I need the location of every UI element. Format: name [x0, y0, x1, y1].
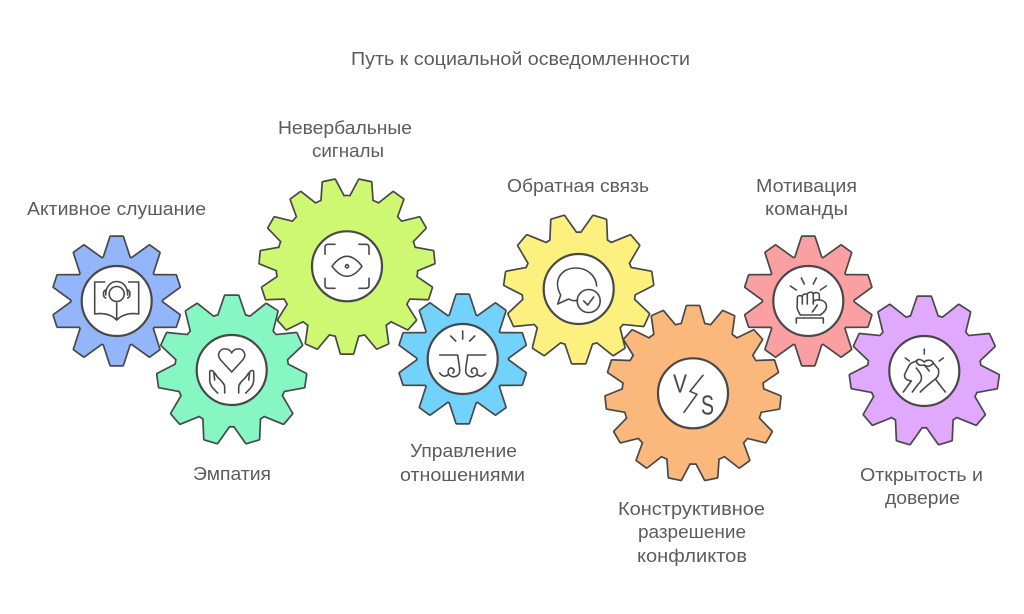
- label: team motivation: команды: [765, 199, 848, 219]
- label: relationship management: Управление: [410, 441, 517, 461]
- icon: versus mark: [673, 368, 714, 420]
- panel: blue gear, active listening: [52, 237, 182, 365]
- label: nonverbal signals: [278, 118, 412, 161]
- icon: raised fist: [790, 278, 826, 323]
- panel: green gear, empathy: [156, 296, 307, 445]
- panel: purple gear, openness and trust: [849, 297, 1000, 446]
- label: relationship management: [400, 441, 525, 485]
- label: relationship management: отношениями: [400, 465, 525, 485]
- label: conflict resolution: Конструктивное: [618, 499, 765, 519]
- label: feedback: Обратная связь: [507, 176, 649, 196]
- label: openness and trust: Открытость и: [860, 465, 983, 485]
- icon: chat bubble with check: [558, 268, 600, 312]
- panel: yellow gear, feedback: [503, 214, 654, 363]
- label: conflict resolution: разрешение: [638, 522, 746, 542]
- label: active listening: Активное слушание: [27, 199, 206, 219]
- label: openness and trust: доверие: [885, 488, 960, 508]
- label: empathy: Эмпатия: [193, 464, 271, 484]
- panel: lime gear, nonverbal signals: [259, 179, 435, 353]
- title: Путь к социальной осведомленности: [351, 49, 690, 69]
- label: conflict resolution: конфликтов: [637, 546, 747, 566]
- label: team motivation: Мотивация: [756, 176, 857, 196]
- icon: two noses facing: [440, 331, 486, 377]
- label: nonverbal signals: Невербальные: [278, 118, 412, 138]
- icon: versus mark: V: [673, 368, 688, 398]
- icon: book with headset: [95, 282, 139, 320]
- icon: versus mark: S: [701, 389, 714, 420]
- panel: orange gear, constructive conflict resolution: [605, 306, 781, 481]
- label: openness and trust: [860, 465, 983, 508]
- label: conflict resolution: [618, 499, 765, 566]
- label: nonverbal signals: сигналы: [312, 141, 384, 161]
- icon: arm wrestling handshake: [903, 349, 945, 392]
- label: team motivation: [756, 176, 857, 219]
- icon: heart in hands: [210, 349, 254, 393]
- icon: eye in focus frame: [325, 244, 369, 288]
- panel: pink gear, team motivation: [743, 237, 873, 365]
- panel: cyan gear, relationship management: [398, 295, 528, 423]
